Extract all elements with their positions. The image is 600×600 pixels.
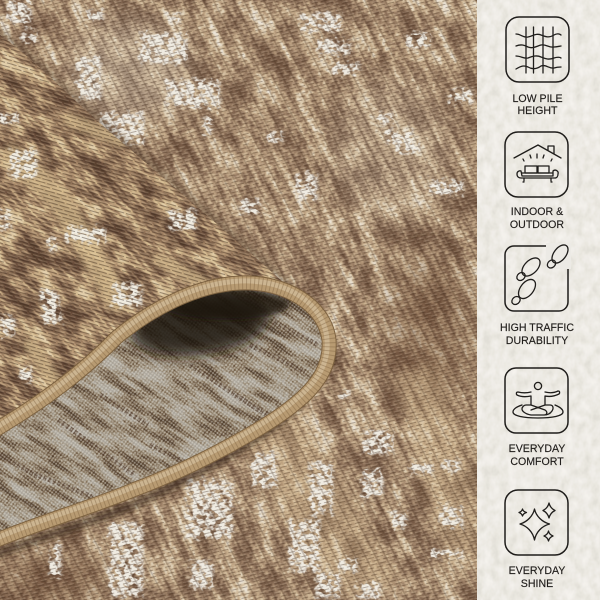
icon: woven pile strands (516, 27, 561, 73)
rug roll: tan diagonal bands (13, 120, 205, 390)
icon: seated meditation figure (513, 382, 563, 418)
rug roll: pale flecks on the top face (0, 113, 197, 383)
label: high traffic durability: DURABILITY (506, 335, 568, 347)
label: high traffic durability: HIGH TRAFFIC (500, 322, 574, 334)
label: indoor and outdoor: INDOOR & (511, 206, 563, 218)
label: low pile height: HEIGHT (517, 105, 558, 117)
icon: footprints (510, 242, 571, 306)
rug roll: dark hollow inside the fold (127, 286, 273, 364)
feature: low pile height (506, 17, 569, 117)
feature: everyday shine (505, 490, 568, 590)
icon: sparkles (519, 503, 555, 541)
label: indoor and outdoor: OUTDOOR (510, 219, 564, 231)
label: everyday shine: SHINE (521, 578, 553, 590)
rug roll: underside of the folded rug (0, 290, 322, 530)
feature: indoor and outdoor (505, 132, 568, 231)
rug roll: top face of the folded rug (0, 35, 282, 418)
rug roll: soft shadow along the fold (0, 28, 292, 288)
label: everyday shine: EVERYDAY (509, 565, 565, 577)
rug roll: brown bands seen through the backing (0, 320, 318, 500)
photo: pale worn flecks (8, 0, 474, 598)
label: everyday comfort: COMFORT (510, 456, 564, 468)
side panel: off-white textured column (477, 0, 600, 600)
feature: high traffic durability (500, 242, 574, 347)
icon: house roof with sofa (514, 145, 561, 182)
photo: woven rug floor surface (0, 0, 477, 600)
photo: tan woven bands at the bottom (240, 360, 477, 600)
label: everyday comfort: EVERYDAY (509, 443, 565, 455)
shadow under the rolled rug (0, 350, 332, 556)
label: low pile height: LOW PILE (512, 93, 563, 105)
rug roll: rope binding edge (0, 281, 329, 542)
feature: everyday comfort (505, 368, 568, 468)
